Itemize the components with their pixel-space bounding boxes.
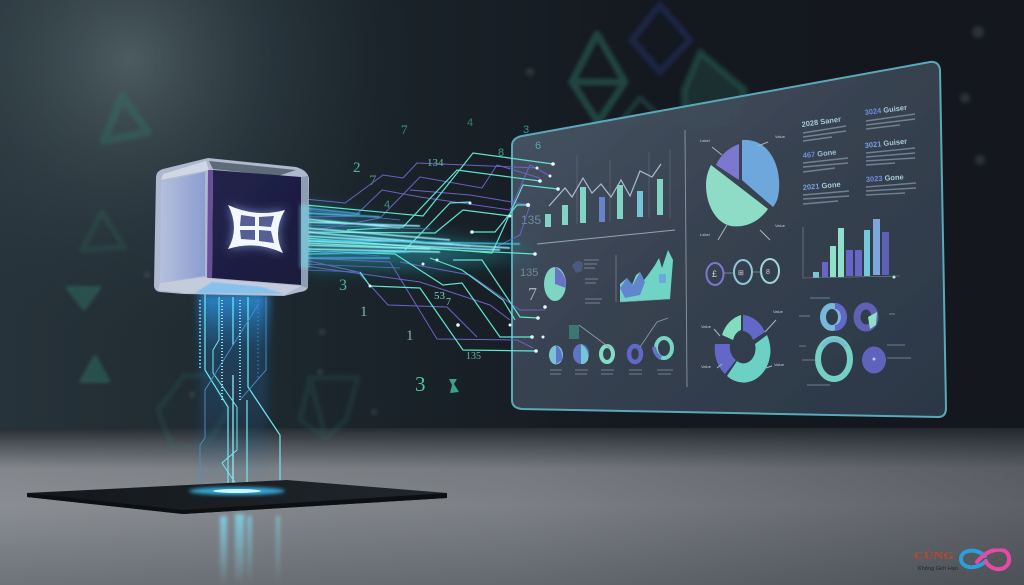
- floating numbers: 7: [401, 122, 408, 137]
- floating numbers: 53: [434, 290, 446, 302]
- row of small donuts: [549, 318, 673, 374]
- floor reflection: [220, 514, 280, 585]
- bar and line chart: 7: [528, 284, 537, 304]
- cube top bevel: [209, 161, 296, 176]
- panel divider: [685, 130, 687, 387]
- panel: glass dashboard: [512, 62, 946, 417]
- floating numbers: 135: [466, 351, 481, 362]
- blue secondary traces: [200, 297, 266, 490]
- floor: [0, 428, 1024, 585]
- ghost geometric shapes: [66, 5, 745, 447]
- teal circuit lines: [305, 153, 558, 351]
- text blocks: 3023 Gone: [866, 172, 904, 184]
- icon: infinity loop: [961, 550, 1009, 569]
- large pie chart: Label: [700, 138, 710, 143]
- cube: [154, 158, 310, 296]
- large pie chart: Value: [775, 223, 786, 228]
- bar and line chart: 6: [535, 140, 541, 152]
- cyan circuit traces: [205, 293, 280, 492]
- base plate: [27, 480, 447, 514]
- floating numbers: 134: [427, 157, 444, 169]
- floating numbers: 3: [415, 372, 426, 396]
- logo wordmark: CÙNG: [914, 550, 954, 562]
- glowing pad: [189, 487, 285, 495]
- large donut chart: Value: [773, 309, 784, 314]
- small ring gauges: ⊞: [738, 270, 744, 277]
- stream glow: [305, 205, 540, 268]
- small ring gauges: 8: [766, 269, 770, 276]
- floating numbers: 8: [498, 147, 504, 159]
- bright core lines: [305, 208, 520, 258]
- text blocks: 2021 Gone: [802, 180, 841, 192]
- floating numbers: 7: [369, 173, 377, 189]
- floating bokeh dots: [144, 26, 985, 415]
- purple circuit lines: [305, 163, 550, 348]
- text blocks: [801, 103, 916, 204]
- bar and line chart: [520, 140, 675, 304]
- large donut chart: [701, 309, 785, 383]
- small ring gauges: [706, 259, 779, 285]
- floating numbers: [339, 117, 529, 396]
- small green figure icon: [449, 379, 459, 393]
- panel body: [512, 62, 946, 417]
- cube left face: [160, 172, 205, 282]
- beam: vertical light column: [200, 292, 280, 492]
- large donut chart: Value: [701, 324, 712, 329]
- large donut chart: Value: [774, 362, 785, 367]
- beam glow: [200, 292, 268, 482]
- bar and line chart: 135: [520, 267, 538, 279]
- floating numbers: 4: [384, 199, 390, 211]
- floating numbers: 4: [467, 117, 473, 129]
- large pie chart: Value: [775, 134, 786, 139]
- text blocks: 467 Gone: [802, 148, 837, 160]
- floating numbers: 3: [339, 277, 347, 294]
- floating numbers: 1: [406, 328, 414, 344]
- data streams: horizontal bundle: [305, 153, 560, 353]
- floating numbers: 7: [446, 297, 451, 308]
- text blocks: 3021 Guiser: [864, 137, 908, 150]
- left pie chart: [544, 260, 602, 303]
- floating numbers: 2: [353, 160, 360, 176]
- logo tagline: Không Giới Hạn: [918, 566, 958, 572]
- bottom right donuts: [799, 298, 911, 385]
- text blocks: 3024 Guiser: [864, 103, 908, 117]
- floating numbers: 1: [360, 304, 368, 320]
- large pie chart: [700, 134, 786, 240]
- cube glass shell: [154, 158, 309, 296]
- cube bottom bevel: [158, 277, 301, 295]
- small ring gauges: £: [712, 269, 717, 279]
- text blocks: 2028 Saner: [801, 115, 842, 129]
- right rim highlight: [301, 176, 308, 288]
- large donut chart: Value: [701, 364, 712, 369]
- floating numbers: 3: [523, 124, 529, 136]
- colourful bar chart: [803, 219, 900, 278]
- background wall: [0, 0, 1024, 440]
- icon: glowing glyph: [228, 205, 285, 253]
- area chart: [616, 250, 673, 302]
- bar and line chart: 135: [521, 213, 541, 227]
- logo: [914, 550, 1009, 572]
- cube front face: [212, 170, 301, 285]
- node dots: [368, 162, 560, 353]
- large pie chart: Label: [700, 232, 710, 237]
- faint dim lines: [305, 210, 430, 272]
